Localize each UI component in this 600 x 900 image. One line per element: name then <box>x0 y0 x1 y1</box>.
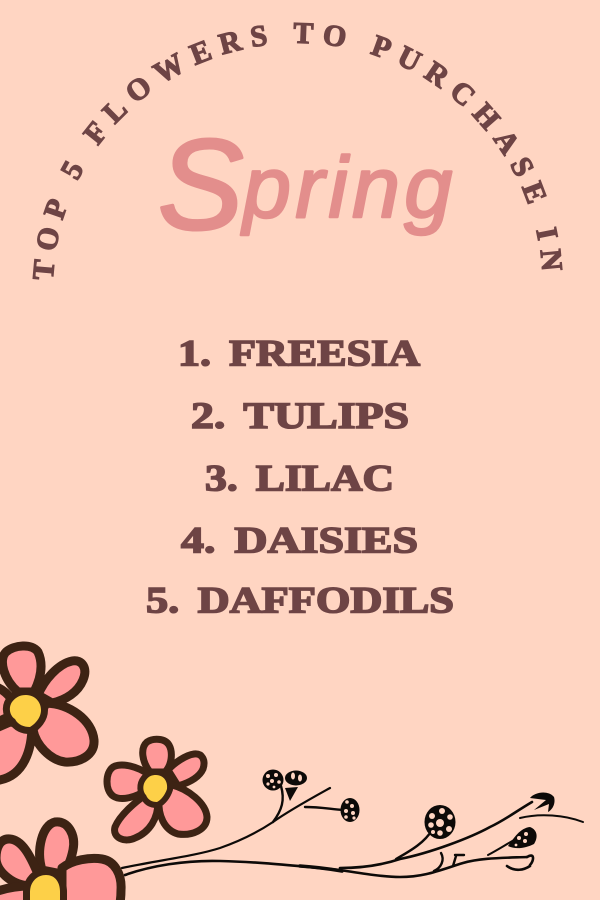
petal: upper right <box>168 754 204 786</box>
list item 1: 1. FREESIA <box>178 334 420 374</box>
bud: lower right hook <box>507 856 533 870</box>
branch with buds <box>122 786 583 877</box>
list item 2: 2. TULIPS <box>191 396 409 437</box>
flower centre <box>30 875 60 900</box>
bud: upper right arrow <box>530 793 555 812</box>
list item 5: 5. DAFFODILS <box>146 580 454 622</box>
flower centre <box>143 775 167 802</box>
petal: lower right <box>33 703 94 762</box>
petal: left <box>0 684 12 730</box>
script title: Spring: pring <box>240 140 457 236</box>
flower centre <box>10 695 41 727</box>
flower 1: large, top left <box>0 646 94 781</box>
bud: large centre <box>424 805 456 839</box>
petal: upper right <box>38 661 85 703</box>
petal: right <box>62 858 121 900</box>
list item 4: 4. DAISIES <box>181 520 418 562</box>
petal: lower left <box>115 794 158 840</box>
list item 3: 3. LILAC <box>205 458 394 500</box>
script title: Spring: S <box>158 114 243 257</box>
bud: upper left pair <box>262 770 307 801</box>
flower 3: bottom left <box>0 822 121 900</box>
buds <box>262 770 555 870</box>
bud: lower right cluster <box>508 827 537 848</box>
petal: lower left <box>0 886 30 900</box>
curved heading: TOP 5 FLOWERS TO PURCHASE IN <box>32 22 563 280</box>
petal: top <box>2 646 41 692</box>
petal: lower left <box>0 722 32 781</box>
petal: top <box>143 739 171 772</box>
petal: left <box>107 765 148 798</box>
petal: top <box>40 822 74 874</box>
bud: small right of first sprig <box>340 798 360 822</box>
flower list <box>146 334 454 622</box>
petal: upper left <box>0 839 38 886</box>
flower 2: medium, centre <box>107 739 207 840</box>
petal: lower right <box>159 785 207 834</box>
